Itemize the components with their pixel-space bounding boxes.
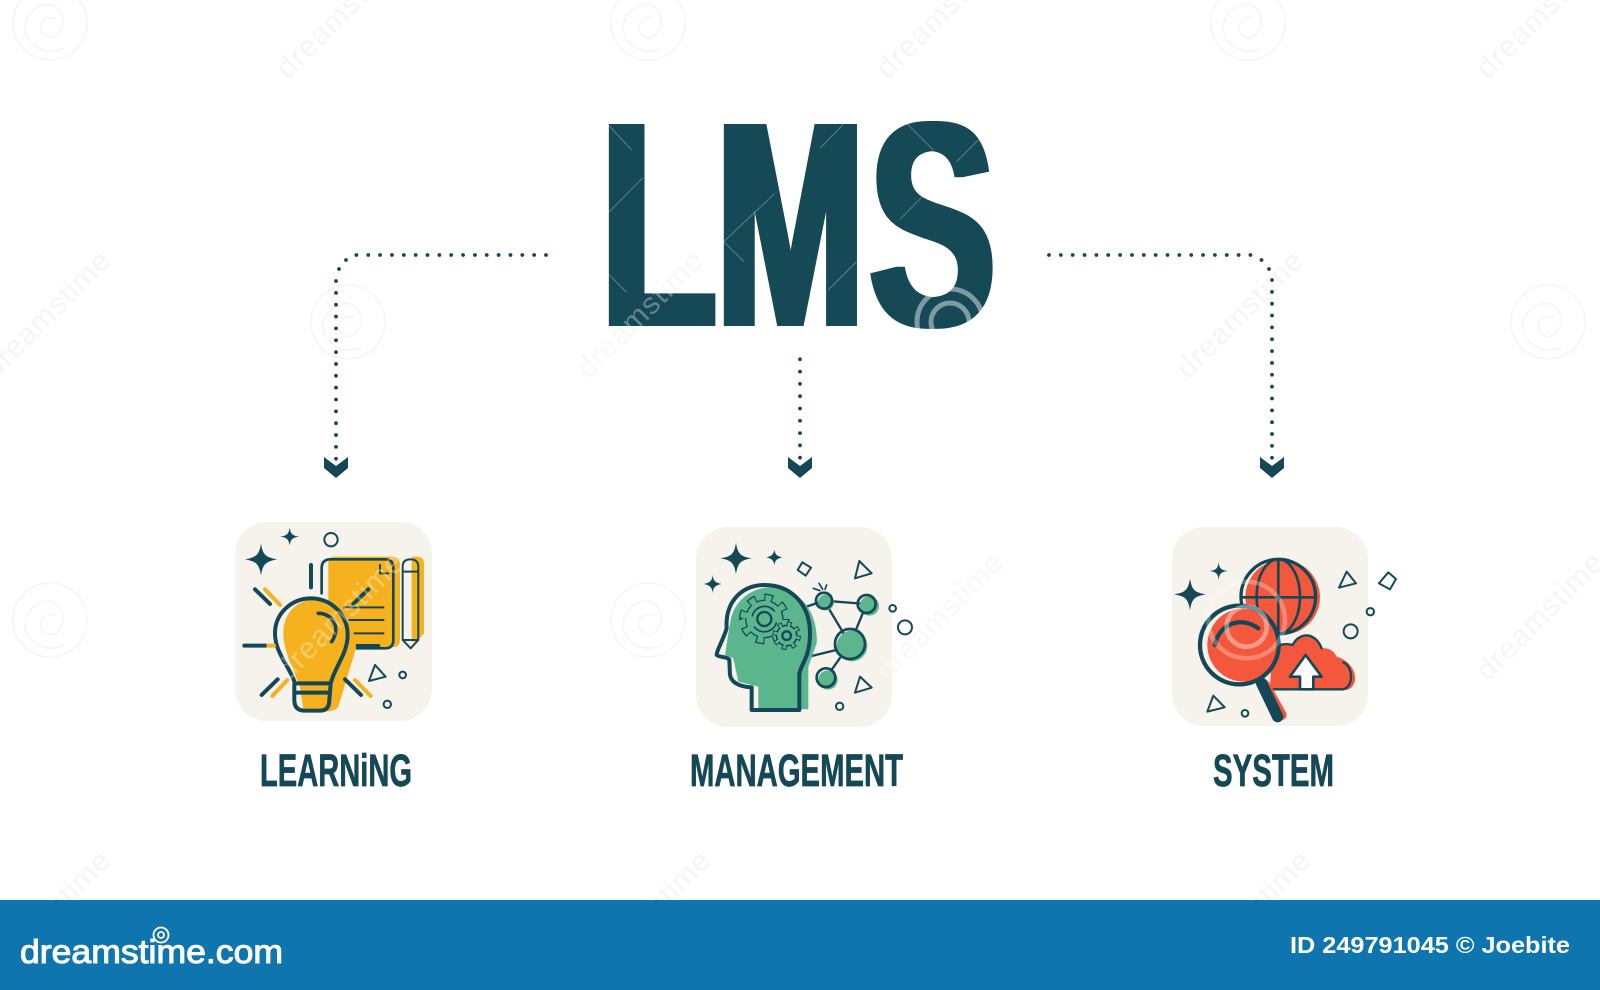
watermark over artwork: dreamstime	[270, 546, 411, 687]
title: LMS: S	[869, 62, 996, 389]
arrow: left dotted connector	[324, 255, 546, 478]
footer logo text: dreamstime.com	[20, 933, 283, 970]
footer image id and credit: ID 249791045 © Joebite	[1290, 932, 1570, 958]
panel background	[696, 527, 892, 727]
watermark: dreamstime	[1170, 244, 1311, 385]
panel background	[235, 522, 432, 721]
icon: head with gears and network	[704, 543, 912, 710]
title: LMS	[600, 60, 996, 389]
arrow: centre dotted connector	[788, 359, 812, 478]
footer logo swirl	[154, 928, 168, 942]
watermark over artwork	[270, 244, 1011, 687]
watermark spiral over the S	[917, 289, 983, 355]
title: LMS: M	[716, 60, 865, 389]
watermark: dreamstime	[570, 244, 711, 385]
watermark over artwork: dreamstime	[570, 244, 711, 385]
icon: globe, magnifier and cloud	[1174, 559, 1396, 717]
label: learning: LEARNiNG	[260, 745, 412, 796]
watermark: dreamstime	[577, 844, 718, 985]
panel: system	[1172, 527, 1396, 796]
arrow: right dotted connector	[1049, 255, 1284, 478]
panel: learning	[235, 522, 432, 796]
panel: management	[690, 527, 912, 796]
footer bar	[0, 900, 1600, 990]
panel background	[1172, 527, 1368, 726]
icon: light bulb and notes	[244, 528, 424, 712]
title: LMS: L	[600, 60, 717, 389]
label: system: SYSTEM	[1213, 745, 1334, 796]
watermark: dreamstime	[1177, 844, 1318, 985]
watermark: dreamstime	[870, 546, 1011, 687]
label: management: MANAGEMENT	[690, 745, 903, 796]
watermark lines over the title	[609, 123, 980, 292]
watermark over artwork: dreamstime	[870, 546, 1011, 687]
